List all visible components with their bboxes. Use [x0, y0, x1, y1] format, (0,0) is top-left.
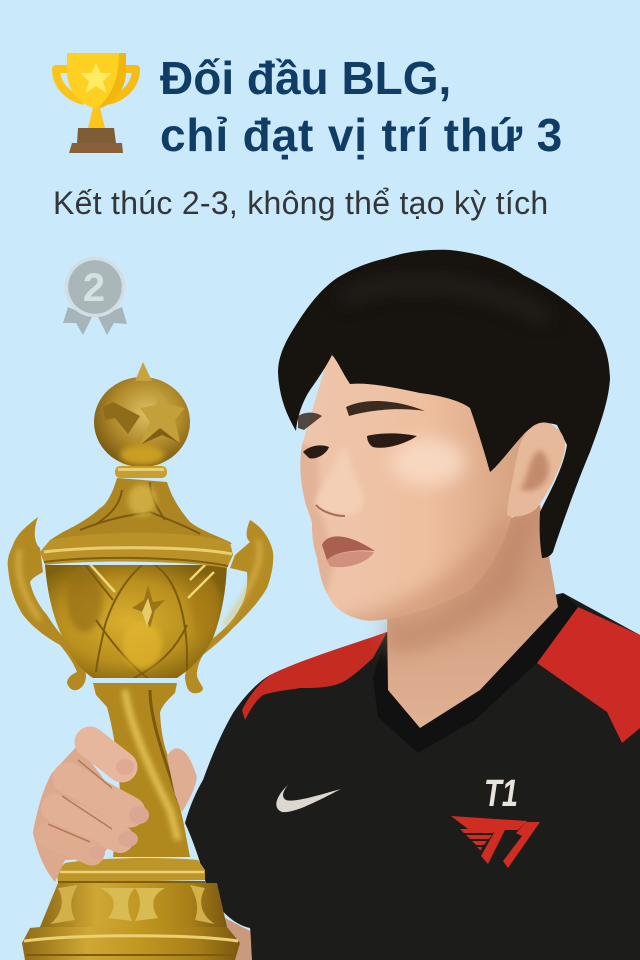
- subtitle: Kết thúc 2-3, không thể tạo kỳ tích: [53, 185, 548, 221]
- icon: silver medal number 2: [63, 258, 127, 335]
- mouth: [322, 536, 375, 567]
- nose: [315, 448, 363, 516]
- thumb: [167, 748, 197, 812]
- jersey red shoulder right: [537, 607, 640, 743]
- fingers: [90, 742, 122, 767]
- player: [185, 250, 640, 960]
- jersey red shoulder left: [242, 632, 387, 720]
- ear: [507, 423, 565, 517]
- icon: silver medal number 2: 2: [83, 266, 105, 310]
- title: Đối đầu BLG,: [160, 52, 451, 104]
- trophy left handle: [8, 517, 86, 690]
- jersey: [185, 593, 640, 960]
- title: chỉ đạt vị trí thứ 3: [160, 109, 563, 161]
- T1 white wordmark: T1: [484, 773, 518, 815]
- neck shadow: [382, 510, 535, 655]
- trophy stem: [93, 683, 190, 857]
- neck: [387, 505, 558, 728]
- right eyebrow: [346, 401, 425, 416]
- jersey collar: [373, 593, 578, 753]
- trophy base: [22, 858, 240, 960]
- left eyebrow: [298, 413, 322, 430]
- hair: [278, 250, 610, 558]
- icon: T1 red logo: [451, 816, 540, 868]
- right eye: [367, 433, 417, 448]
- arm: [224, 918, 254, 960]
- face: [300, 355, 528, 621]
- hand: [33, 742, 197, 882]
- trophy finial: [94, 362, 190, 478]
- cheek highlight: [390, 438, 466, 486]
- trophy cup: [45, 560, 227, 680]
- left eye: [303, 445, 329, 458]
- trophy rim: [40, 533, 233, 568]
- icon: gold trophy: [56, 53, 136, 153]
- trophy right handle: [185, 520, 273, 693]
- icon: nike swoosh: [276, 785, 341, 812]
- fingernails: [116, 759, 134, 775]
- trophy lid: [48, 478, 232, 544]
- title: [160, 52, 563, 161]
- trophy: [8, 362, 273, 960]
- back of hand: [33, 745, 122, 882]
- jaw shading: [346, 520, 509, 621]
